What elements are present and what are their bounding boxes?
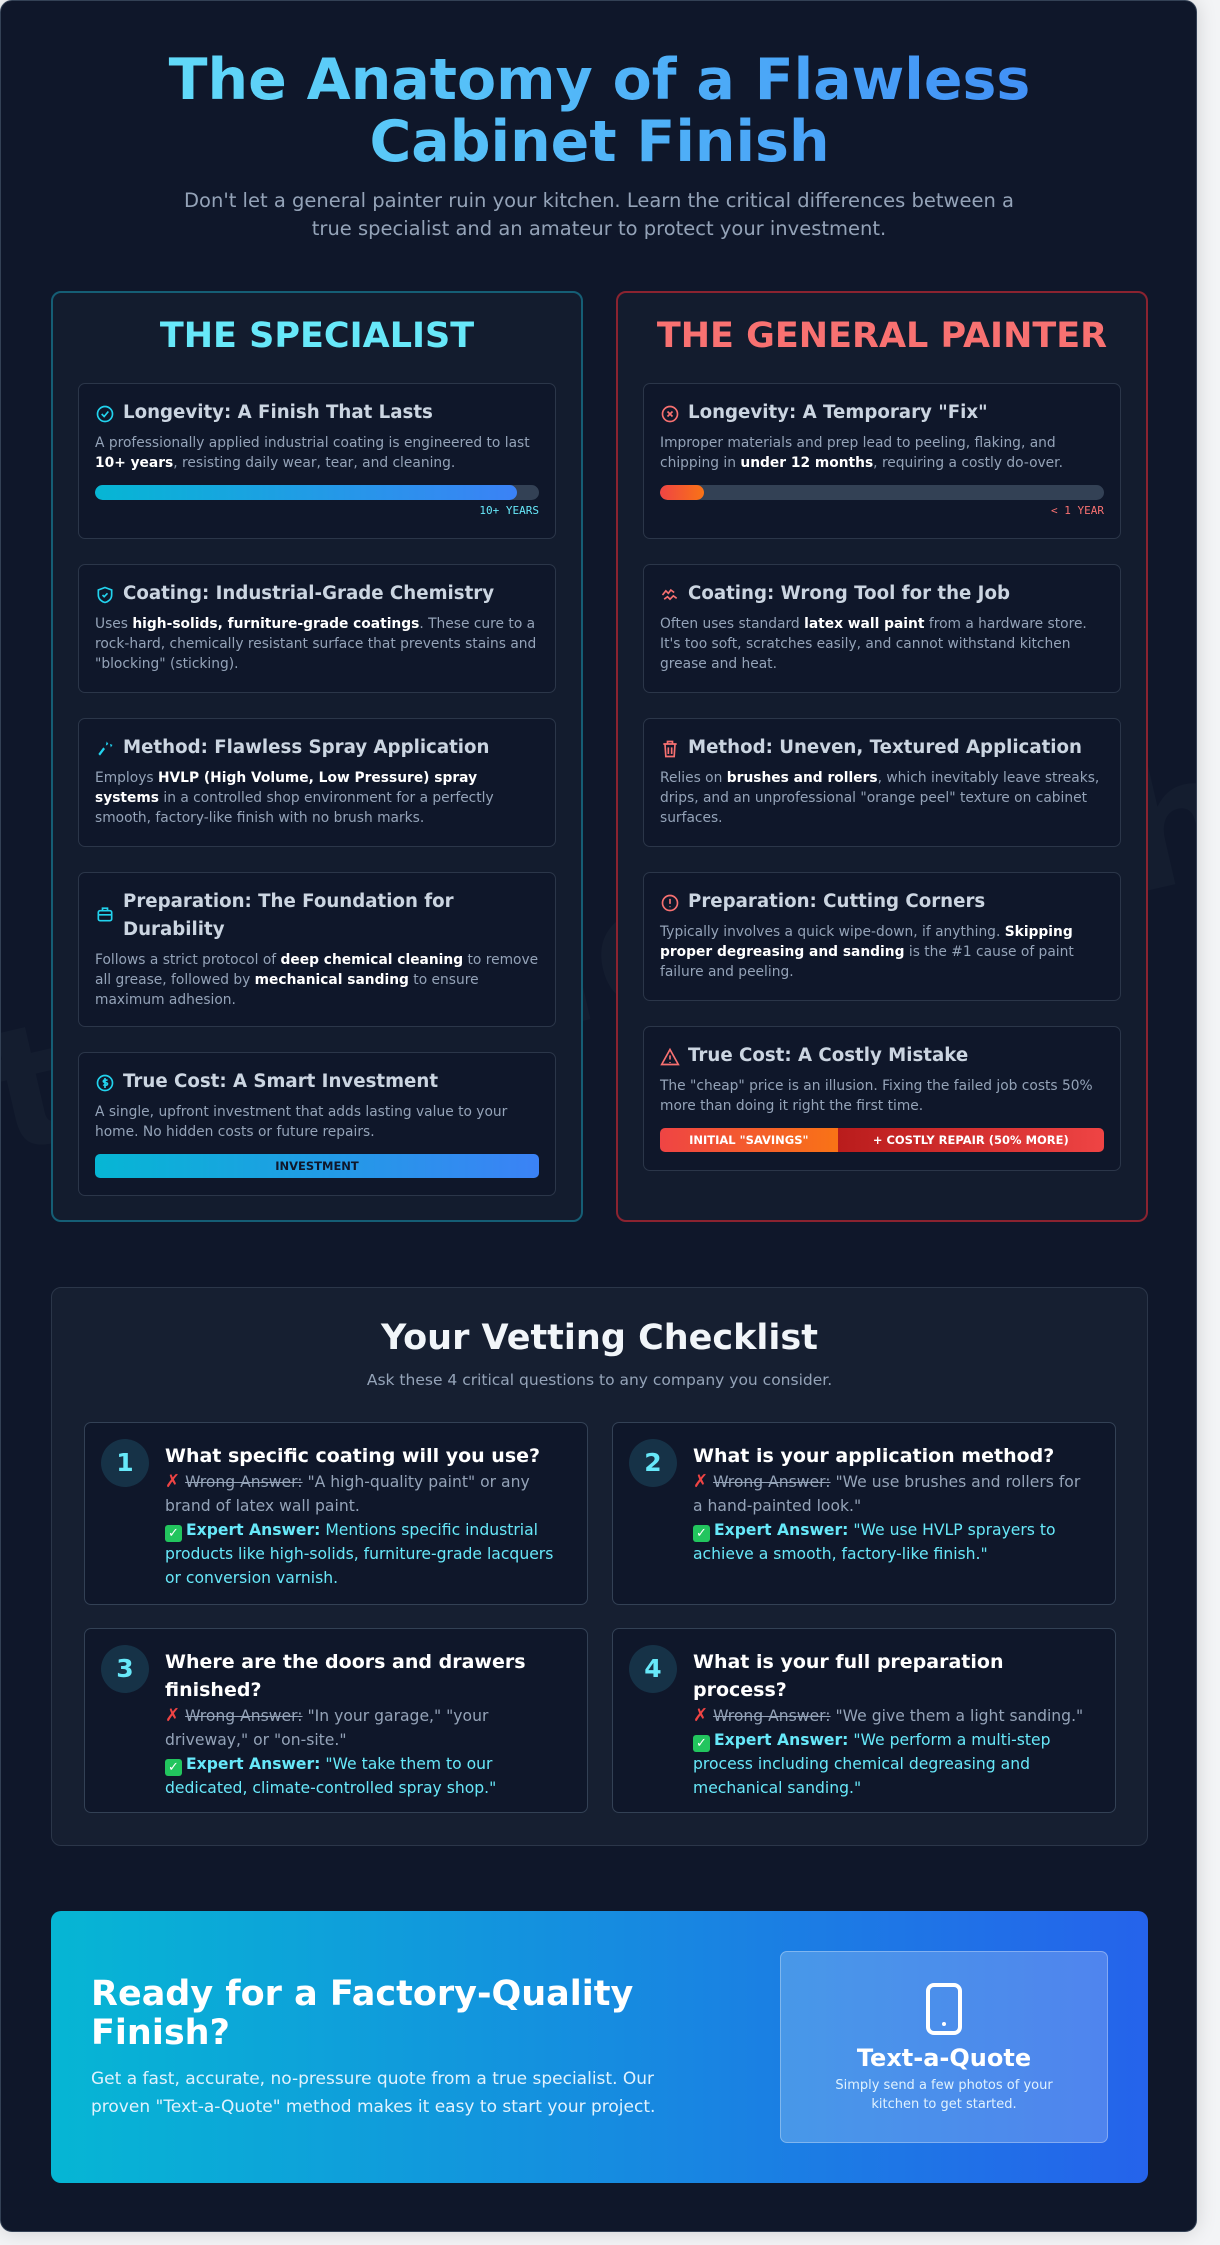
card: true cost specialist: A single, upfront investment that adds lasting value to your home. No hidden costs or future repairs. xyxy=(95,1104,507,1140)
card: longevity specialist xyxy=(78,383,556,539)
question 4: ✓ xyxy=(696,1736,707,1751)
text-a-quote box: Simply send a few photos of your kitchen to get started. xyxy=(835,2078,1053,2112)
card: true cost general: True Cost: A Costly Mistake xyxy=(688,1045,968,1066)
question 3: Where are the doors and drawers finished? xyxy=(165,1651,526,1701)
card: preparation specialist: Preparation: The Foundation for Durability xyxy=(123,891,454,940)
question 2: ✗ Wrong Answer: "We use brushes and rollers for a hand-painted look." xyxy=(693,1471,1080,1515)
card: coating general xyxy=(643,564,1121,693)
card: method specialist xyxy=(78,718,556,847)
text-a-quote box xyxy=(780,1951,1108,2143)
question 1: ✓ xyxy=(168,1526,179,1541)
card: method specialist: Employs HVLP (High Volume, Low Pressure) spray systems in a controlled shop environment for a perfectly smooth, factory-like finish with no brush marks. xyxy=(95,770,494,826)
card: true cost specialist xyxy=(78,1052,556,1196)
card: coating general: Often uses standard latex wall paint from a hardware store. It's too soft, scratches easily, and cannot withstand kitchen grease and heat. xyxy=(660,616,1087,672)
bar: 10+ years xyxy=(95,485,539,500)
card: preparation specialist: Follows a strict protocol of deep chemical cleaning to remove all grease, followed by mechanical sanding to ensure maximum adhesion. xyxy=(95,952,538,1008)
checklist subtitle: Ask these 4 critical questions to any company you consider. xyxy=(367,1371,832,1389)
panel: vetting checklist xyxy=(51,1287,1148,1846)
question 3 xyxy=(84,1628,588,1813)
question 2: What is your application method? xyxy=(693,1445,1054,1467)
card: longevity general xyxy=(643,383,1121,539)
question 3: ✓ xyxy=(168,1760,179,1775)
card: longevity specialist: 10+ YEARS xyxy=(479,504,539,517)
subtitle: Don't let a general painter ruin your kitchen. Learn the critical differences between a true specialist and an amateur to protect your investment. xyxy=(184,189,1014,240)
card: longevity general: Improper materials and prep lead to peeling, flaking, and chipping in under 12 months, requiring a costly do-over. xyxy=(660,435,1063,471)
card: longevity general: < 1 YEAR xyxy=(1051,504,1104,517)
cta heading: Ready for a Factory-Quality Finish? xyxy=(91,1974,633,2053)
bar: investment xyxy=(95,1154,539,1178)
checklist heading: Your Vetting Checklist xyxy=(381,1318,818,1358)
bar: investment: INVESTMENT xyxy=(275,1159,359,1173)
title xyxy=(1,49,1198,173)
text-a-quote box: Text-a-Quote xyxy=(857,2044,1031,2072)
question 4: Expert Answer: "We perform a multi-step process including chemical degreasing and mechanical sanding." xyxy=(693,1731,1051,1797)
bar: cost comparison xyxy=(660,1128,1104,1152)
card: method general: Method: Uneven, Textured Application xyxy=(688,737,1082,758)
question 2: Expert Answer: "We use HVLP sprayers to achieve a smooth, factory-like finish." xyxy=(693,1521,1056,1563)
title: Cabinet Finish xyxy=(369,109,830,175)
question 1: Expert Answer: Mentions specific industrial products like high-solids, furniture-grade lacquers or conversion varnish. xyxy=(165,1521,553,1587)
question 4: What is your full preparation process? xyxy=(693,1651,1003,1701)
card: coating specialist xyxy=(78,564,556,693)
question 3: 3 xyxy=(116,1654,134,1683)
question 2 xyxy=(612,1422,1116,1605)
card: longevity specialist: A professionally applied industrial coating is engineered to last 10+ years, resisting daily wear, tear, and cleaning. xyxy=(95,435,530,471)
heading: specialist: THE SPECIALIST xyxy=(160,316,474,356)
question 1: 1 xyxy=(116,1448,134,1477)
card: preparation specialist xyxy=(78,872,556,1027)
cta text: Get a fast, accurate, no-pressure quote from a true specialist. Our proven "Text-a-Quote" method makes it easy to start your project. xyxy=(91,2069,655,2117)
card: preparation general: Typically involves a quick wipe-down, if anything. Skipping proper degreasing and sanding is the #1 cause of paint failure and peeling. xyxy=(660,924,1074,980)
card: method general: Relies on brushes and rollers, which inevitably leave streaks, drips, and an unprofessional "orange peel" texture on cabinet surfaces. xyxy=(660,770,1099,826)
question 1 xyxy=(84,1422,588,1605)
card: true cost general xyxy=(643,1026,1121,1171)
question 4: 4 xyxy=(644,1654,662,1683)
card: method general xyxy=(643,718,1121,847)
bar: cost comparison: INITIAL "SAVINGS" xyxy=(689,1133,809,1147)
card: coating specialist: Coating: Industrial-Grade Chemistry xyxy=(123,583,494,604)
panel: general painter xyxy=(616,291,1148,1222)
heading: general painter: THE GENERAL PAINTER xyxy=(657,316,1107,356)
icon: phone xyxy=(926,1983,962,2035)
card: preparation general xyxy=(643,872,1121,1001)
panel: call to action xyxy=(51,1911,1148,2183)
question 1: What specific coating will you use? xyxy=(165,1445,540,1467)
card: coating general: Coating: Wrong Tool for the Job xyxy=(688,583,1010,604)
bar: cost comparison: + COSTLY REPAIR (50% MORE) xyxy=(873,1133,1069,1147)
card: method specialist: Method: Flawless Spray Application xyxy=(123,737,489,758)
panel: specialist xyxy=(51,291,583,1222)
card: true cost specialist: True Cost: A Smart Investment xyxy=(123,1071,438,1092)
question 1: ✗ Wrong Answer: "A high-quality paint" or any brand of latex wall paint. xyxy=(165,1471,530,1515)
question 4 xyxy=(612,1628,1116,1813)
card: longevity specialist: Longevity: A Finish That Lasts xyxy=(123,402,433,423)
question 2: ✓ xyxy=(696,1526,707,1541)
card: preparation general: Preparation: Cutting Corners xyxy=(688,891,985,912)
question 4: ✗ Wrong Answer: "We give them a light sanding." xyxy=(693,1705,1083,1726)
card: true cost general: The "cheap" price is an illusion. Fixing the failed job costs 50% more than doing it right the first time. xyxy=(660,1078,1093,1114)
question 3: ✗ Wrong Answer: "In your garage," "your driveway," or "on-site." xyxy=(165,1705,488,1749)
card: longevity general: Longevity: A Temporary "Fix" xyxy=(688,402,988,423)
question 2: 2 xyxy=(644,1448,662,1477)
card: coating specialist: Uses high-solids, furniture-grade coatings. These cure to a rock-hard, chemically resistant surface that prevents stains and "blocking" (sticking). xyxy=(95,616,536,672)
bar: <1 year xyxy=(660,485,1104,500)
title: The Anatomy of a Flawless xyxy=(169,47,1030,113)
question 3: Expert Answer: "We take them to our dedicated, climate-controlled spray shop." xyxy=(165,1755,496,1797)
